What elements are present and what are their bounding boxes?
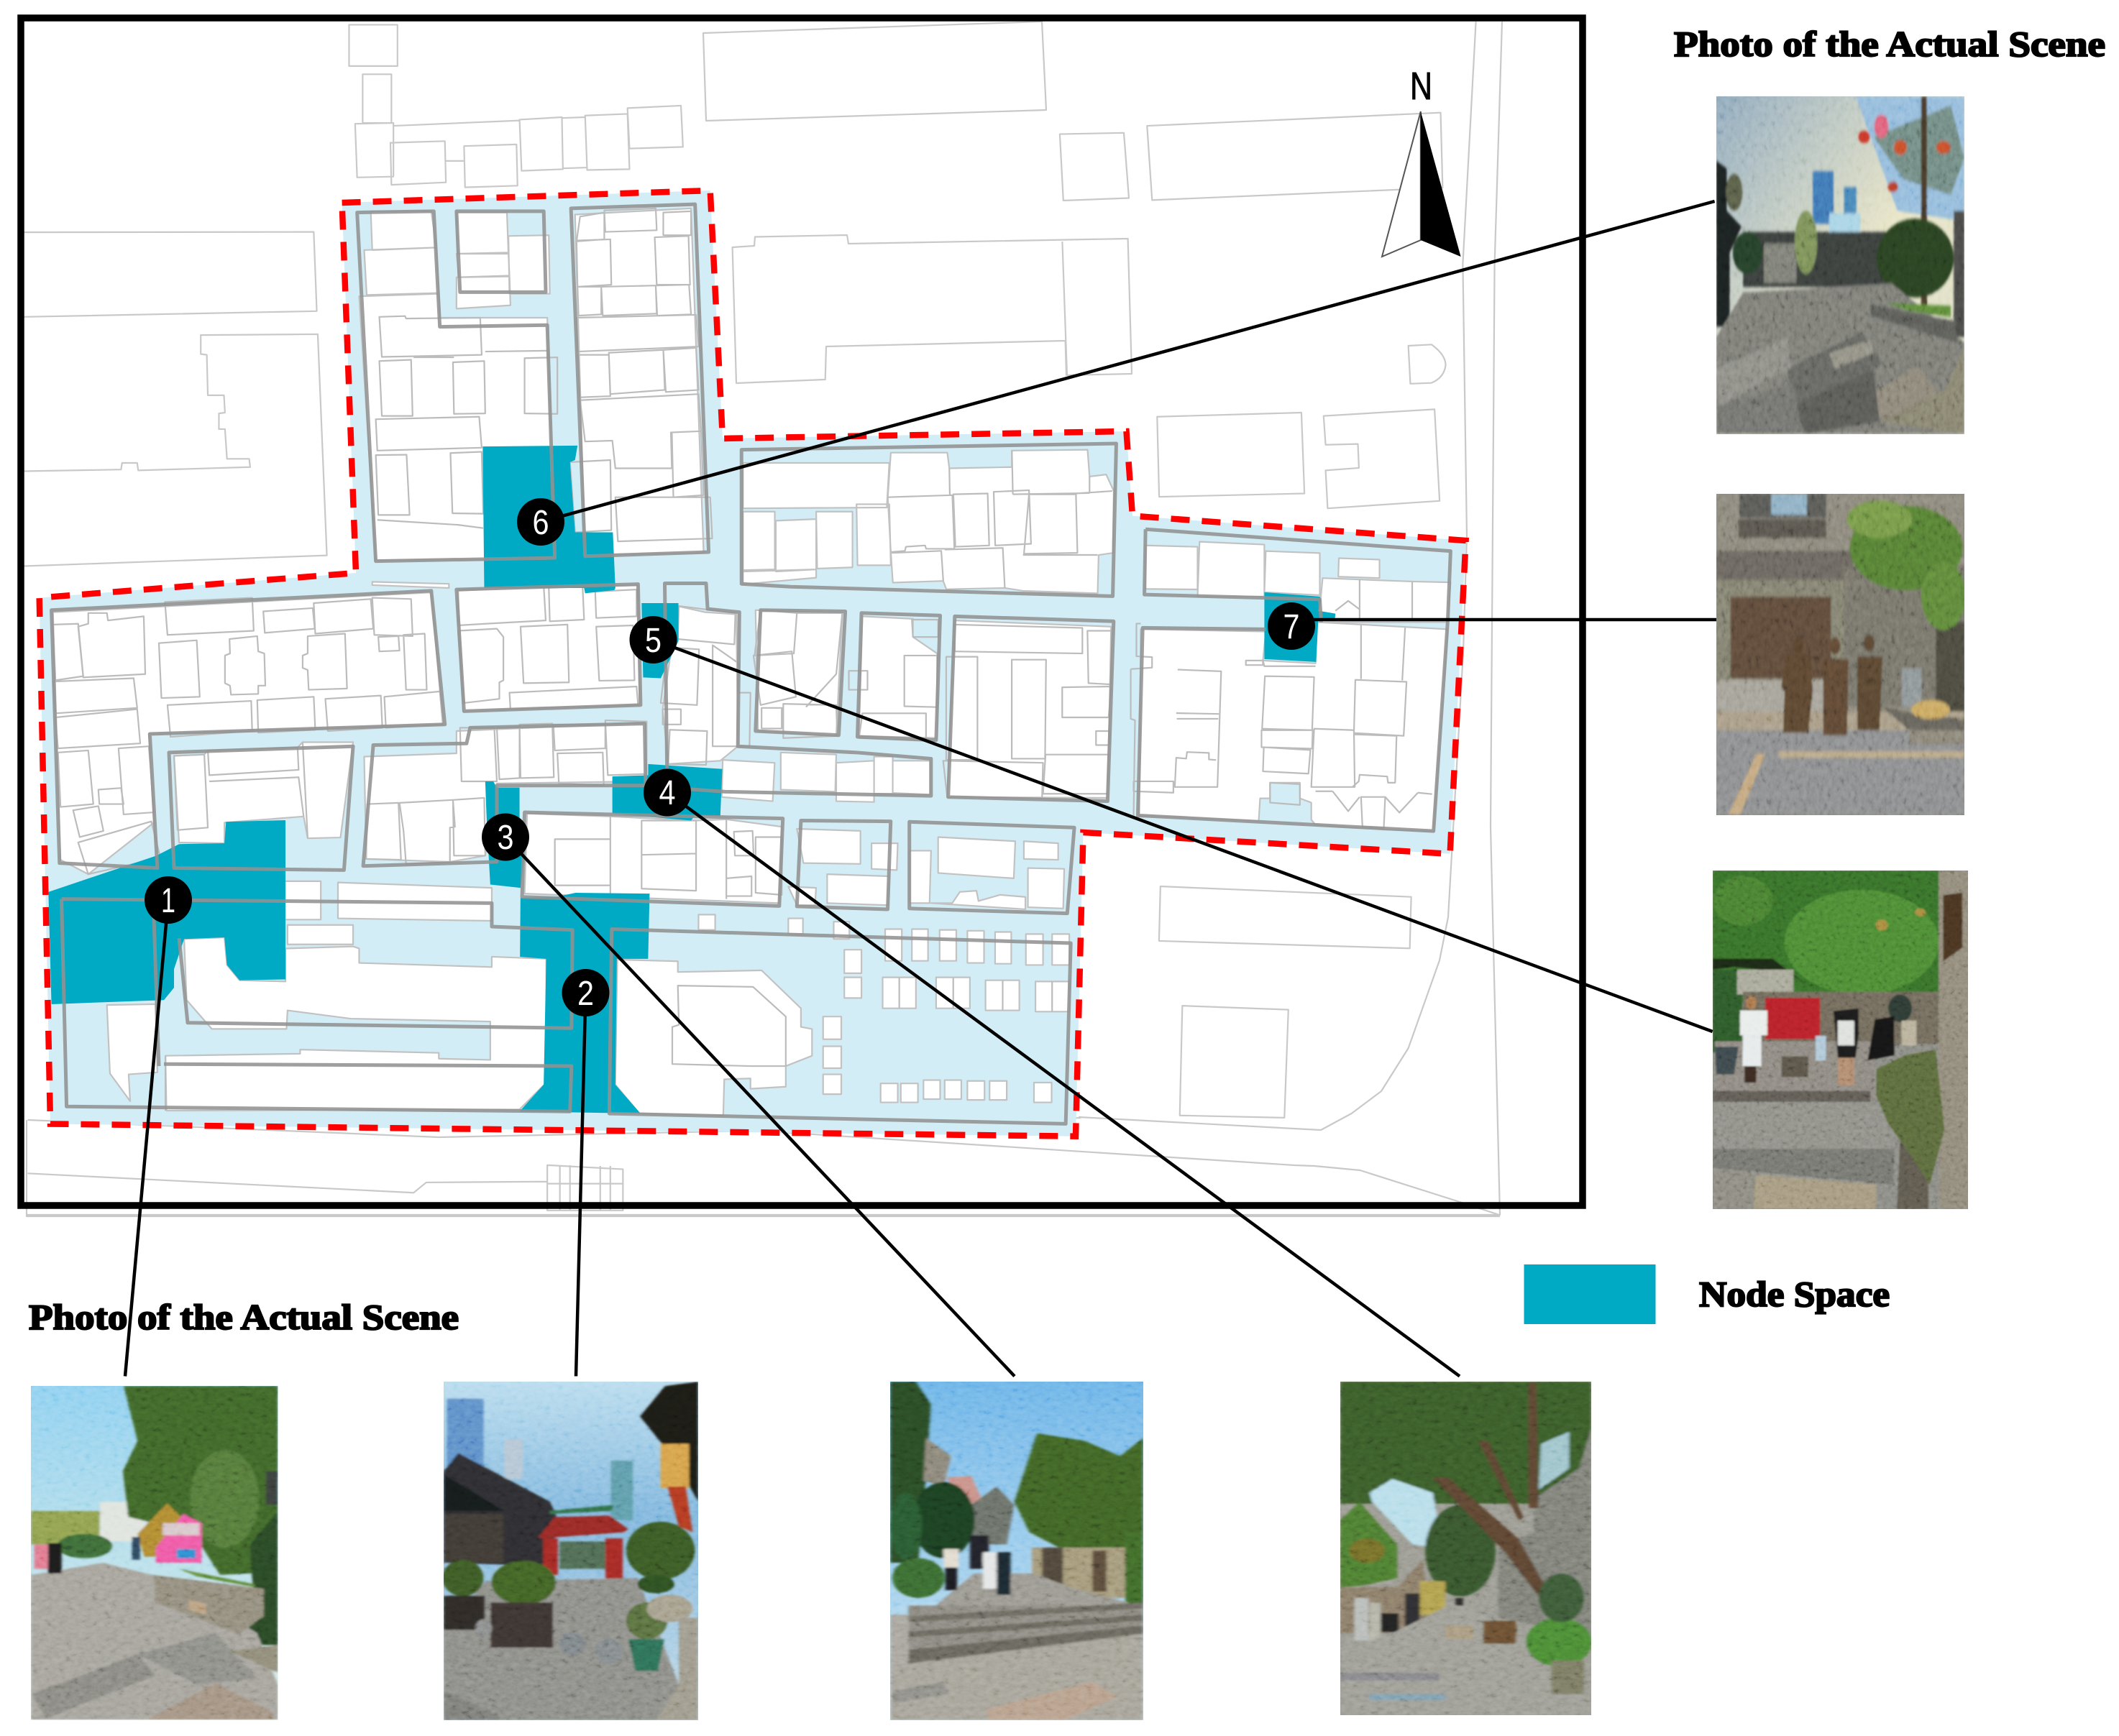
marker 1: 1 xyxy=(161,882,175,920)
marker 7: 7 xyxy=(1283,608,1300,646)
photo: scene 6 xyxy=(1716,96,1964,434)
node space 6 xyxy=(482,446,615,593)
node spaces (teal) xyxy=(48,446,1335,1113)
marker 5: 5 xyxy=(645,622,662,660)
icon: north arrow: N xyxy=(1410,65,1432,108)
panel: site map xyxy=(21,18,1583,1216)
photo: scene 1 xyxy=(31,1386,278,1719)
marker 5 xyxy=(630,616,677,663)
photo: scene 5 xyxy=(1713,871,1968,1209)
marker 2: 2 xyxy=(577,975,594,1013)
icon: north arrow xyxy=(1382,65,1461,257)
marker 6: 6 xyxy=(532,504,549,542)
marker 4: 4 xyxy=(659,774,676,812)
leader lines xyxy=(125,201,1716,1376)
photo: scene 7 xyxy=(1716,494,1964,815)
marker 6 xyxy=(517,498,564,546)
node space 7 xyxy=(1264,592,1335,662)
buildings inside the site xyxy=(53,208,1450,1116)
block outlines (thick grey) xyxy=(52,204,1450,1124)
heading: bottom left photo title: Photo of the Actual Scene xyxy=(29,1297,459,1337)
marker 4 xyxy=(644,769,691,817)
legend: node space xyxy=(1524,1264,1890,1324)
photo: scene 2 xyxy=(444,1382,698,1720)
marker 3: 3 xyxy=(498,819,513,857)
surrounding context buildings and roads xyxy=(24,22,1502,1216)
marker 7 xyxy=(1268,602,1315,650)
marker 2 xyxy=(562,969,610,1016)
marker 3 xyxy=(482,814,529,861)
photo: scene 3 xyxy=(890,1382,1143,1720)
node markers xyxy=(145,498,1315,1016)
legend: node space: Node Space xyxy=(1699,1274,1890,1314)
map frame xyxy=(21,18,1583,1205)
node spaces 1, 3, 4, 5 xyxy=(48,603,723,1004)
node space 2 xyxy=(519,893,649,1113)
red dashed site boundary xyxy=(40,190,1466,1136)
photo: scene 4 xyxy=(1340,1382,1591,1715)
marker 1 xyxy=(145,876,192,924)
light blue public space zone xyxy=(40,190,1466,1136)
heading: top right photo title: Photo of the Actual Scene xyxy=(1674,24,2105,64)
